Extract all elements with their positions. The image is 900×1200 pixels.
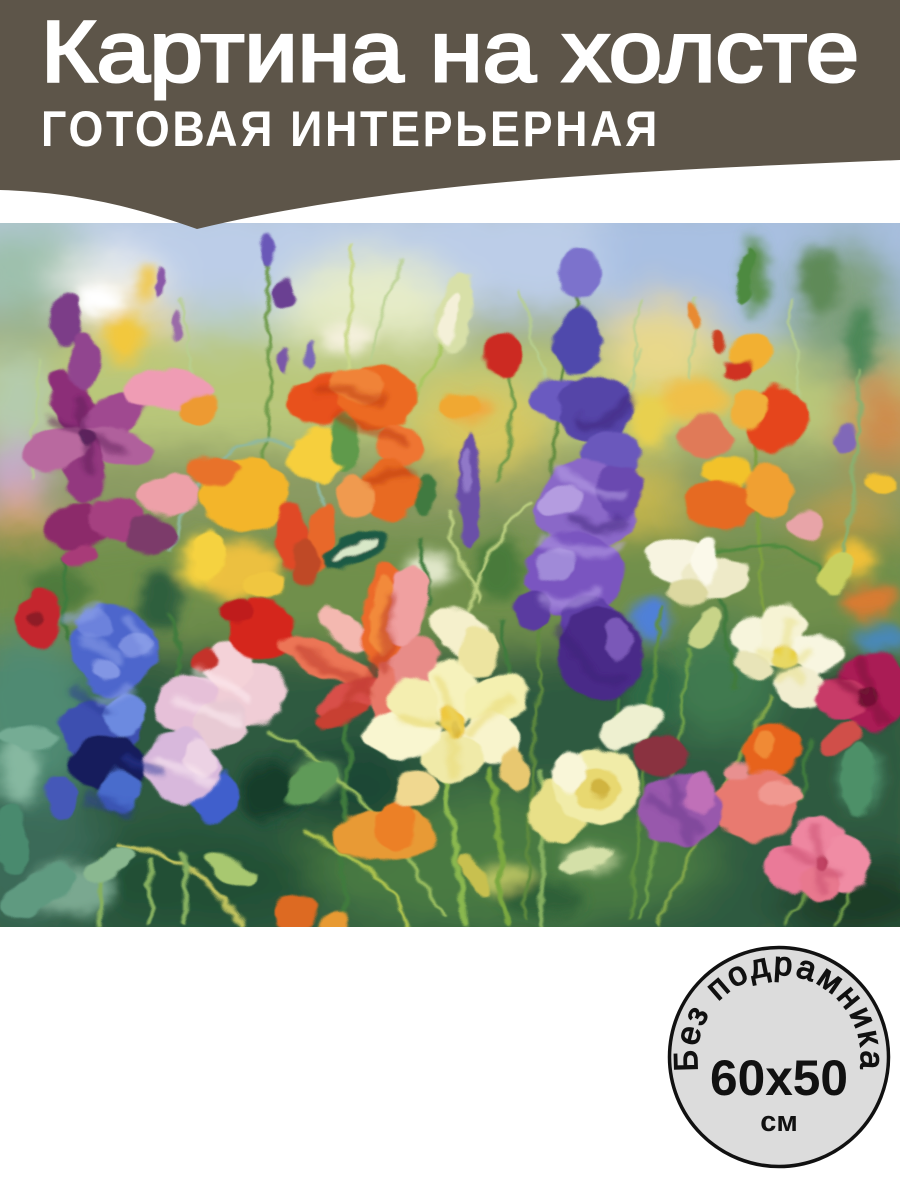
flower: magenta purple top left (21, 367, 156, 504)
flower: small purple spike (458, 430, 480, 550)
flower: orange bottom (273, 770, 437, 935)
leaves (0, 244, 874, 927)
flower: purple buds top left (49, 229, 315, 388)
flower: white cream bud (427, 604, 500, 679)
header banner (0, 0, 900, 229)
flower: red orange lily (275, 499, 341, 586)
badge text: unit: см (760, 1106, 798, 1138)
flower: cream yellow large (364, 658, 538, 784)
flower: blue cluster (44, 606, 239, 824)
flower: cream rose and bud (501, 692, 670, 842)
flower: salmon pink (711, 762, 802, 839)
flower: purple pink lower centre (632, 735, 722, 846)
flower: red centre (191, 598, 296, 670)
flower: red bud and green white bud (429, 271, 522, 417)
flower: pale pink (146, 637, 286, 803)
flower: orange red group right (679, 304, 898, 655)
badge: size (668, 946, 890, 1168)
painting: wildflower meadow (0, 223, 900, 927)
flower: magenta right (814, 652, 900, 760)
subtitle: ГОТОВАЯ ИНТЕРЬЕРНАЯ (41, 101, 660, 157)
flower: red left (16, 592, 64, 648)
brush strokes: petal shading (50, 390, 890, 890)
flower: pink and orange left (126, 370, 220, 515)
flower: orange poppy (288, 366, 424, 520)
flower: dark leaf near lily (320, 530, 389, 571)
badge text: no stretcher: Без подрамника (674, 956, 880, 1070)
badge text: dimensions: 60x50 (710, 1050, 848, 1106)
flower: cream white right (725, 600, 845, 706)
flower: salmon lily (275, 557, 440, 734)
flower: magenta lower left (41, 497, 175, 572)
painting background: sky and meadow colour fields (0, 190, 900, 970)
flower: white right centre (647, 536, 748, 604)
stems and grass blades (30, 250, 860, 925)
flower: pink bottom right (766, 816, 872, 902)
flower: purple tall spike (512, 247, 644, 703)
flower: yellow orange centre left (184, 427, 350, 599)
painting background: loose colour dabs (0, 237, 900, 918)
title: Картина на холсте (41, 4, 859, 100)
flower: orange right (742, 722, 802, 778)
